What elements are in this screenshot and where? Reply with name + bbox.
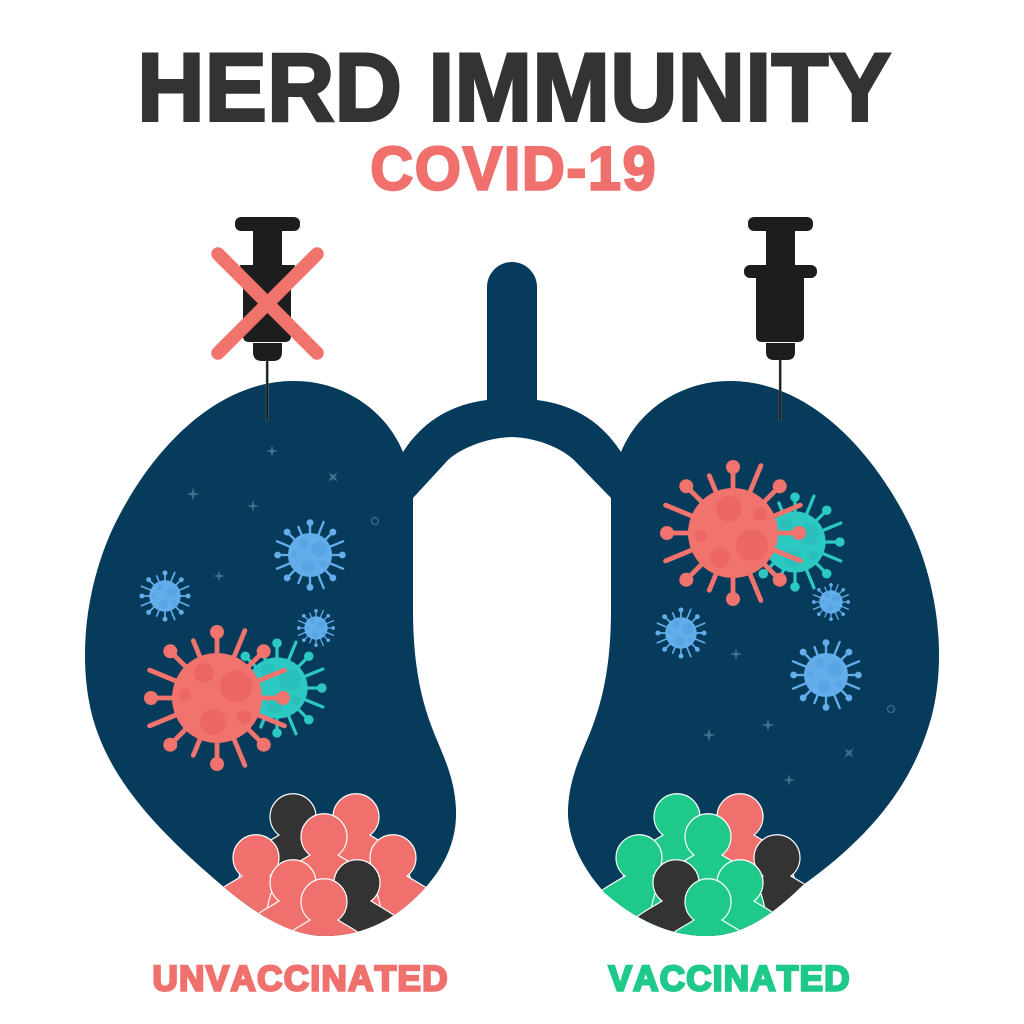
icon: teal virus right (745, 492, 845, 592)
panel: unvaccinated lung contents (140, 446, 426, 936)
label: unvaccinated: UNVACCINATED (152, 960, 448, 998)
people: unvaccinated group (224, 793, 426, 936)
icon: blue virus medium (139, 570, 191, 622)
subtitle: COVID-19 (370, 135, 656, 203)
label: vaccinated: VACCINATED (608, 960, 850, 998)
icon: teal virus (227, 638, 327, 738)
icon: blue virus large right (790, 639, 862, 711)
icon: syringe (744, 217, 817, 421)
red cross (218, 254, 317, 353)
icon: blue virus small right (812, 583, 850, 621)
icon: blue virus large (274, 519, 346, 591)
icon: crossed-out syringe (218, 217, 317, 421)
title: HERD IMMUNITY (137, 34, 891, 142)
sparkles left (186, 445, 378, 582)
sparkles right (702, 648, 894, 786)
syringe left (235, 217, 300, 421)
icon: red virus right (660, 460, 806, 606)
panel: vaccinated lung contents (602, 460, 895, 936)
people: vaccinated group (602, 793, 805, 936)
icon: blue virus medium right (655, 607, 707, 659)
icon: blue virus small (297, 609, 335, 647)
icon: red virus (144, 625, 290, 771)
lungs (85, 262, 939, 936)
